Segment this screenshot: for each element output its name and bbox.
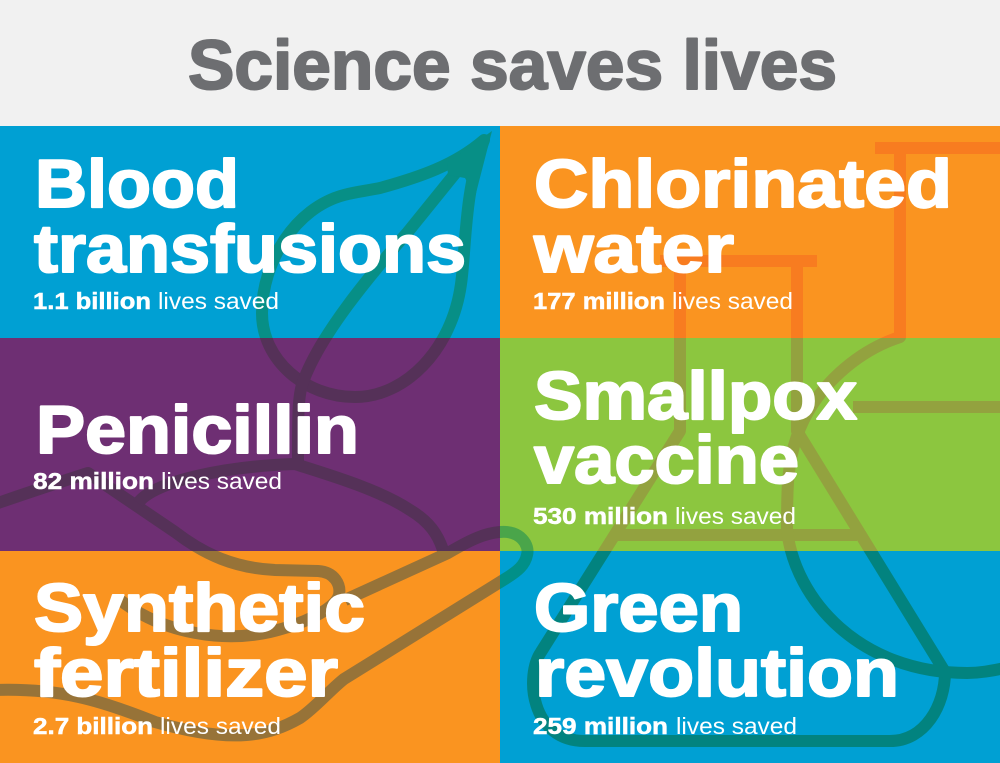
text: penicillin [33,392,359,494]
text: blood transfusions: transfusions [34,211,466,287]
text: synthetic fertilizer: lives saved [160,713,281,739]
text: penicillin: 82 million [33,468,154,494]
text: smallpox vaccine: 530 million [533,503,668,529]
text: synthetic fertilizer: 2.7 billion [33,713,153,739]
title: Science saves lives [188,26,837,104]
text: blood transfusions [33,146,466,314]
panel: synthetic fertilizer [0,551,500,763]
text: penicillin: lives saved [161,468,282,494]
icon: chemistry flasks outline [533,148,1000,741]
panel: green revolution [500,551,1000,763]
text: green revolution: 259 million [533,713,668,739]
text: synthetic fertilizer [33,570,365,739]
text: green revolution: revolution [535,635,899,711]
text: green revolution: Green [534,570,743,646]
text: chlorinated water: 177 million [533,288,665,314]
panel: smallpox vaccine [500,338,1000,551]
panel: penicillin [0,338,500,551]
text: smallpox vaccine [533,358,857,529]
text: smallpox vaccine: Smallpox [534,358,857,434]
text: chlorinated water: water [533,211,734,287]
text: chlorinated water [533,146,952,314]
text: blood transfusions: Blood [35,146,239,222]
text: blood transfusions: lives saved [158,288,279,314]
text: chlorinated water: lives saved [672,288,793,314]
panel: chlorinated water [500,126,1000,338]
text: synthetic fertilizer: Synthetic [34,570,365,646]
icon: leaf and hand outline [0,131,528,735]
text: green revolution: lives saved [676,713,797,739]
text: synthetic fertilizer: fertilizer [34,635,338,711]
text: smallpox vaccine: lives saved [675,503,796,529]
text: green revolution [533,570,899,739]
text: penicillin: Penicillin [36,392,359,468]
text: blood transfusions: 1.1 billion [33,288,151,314]
title band [0,0,1000,126]
panel: blood transfusions [0,126,500,338]
text: smallpox vaccine: vaccine [534,422,799,498]
text: chlorinated water: Chlorinated [534,146,952,222]
